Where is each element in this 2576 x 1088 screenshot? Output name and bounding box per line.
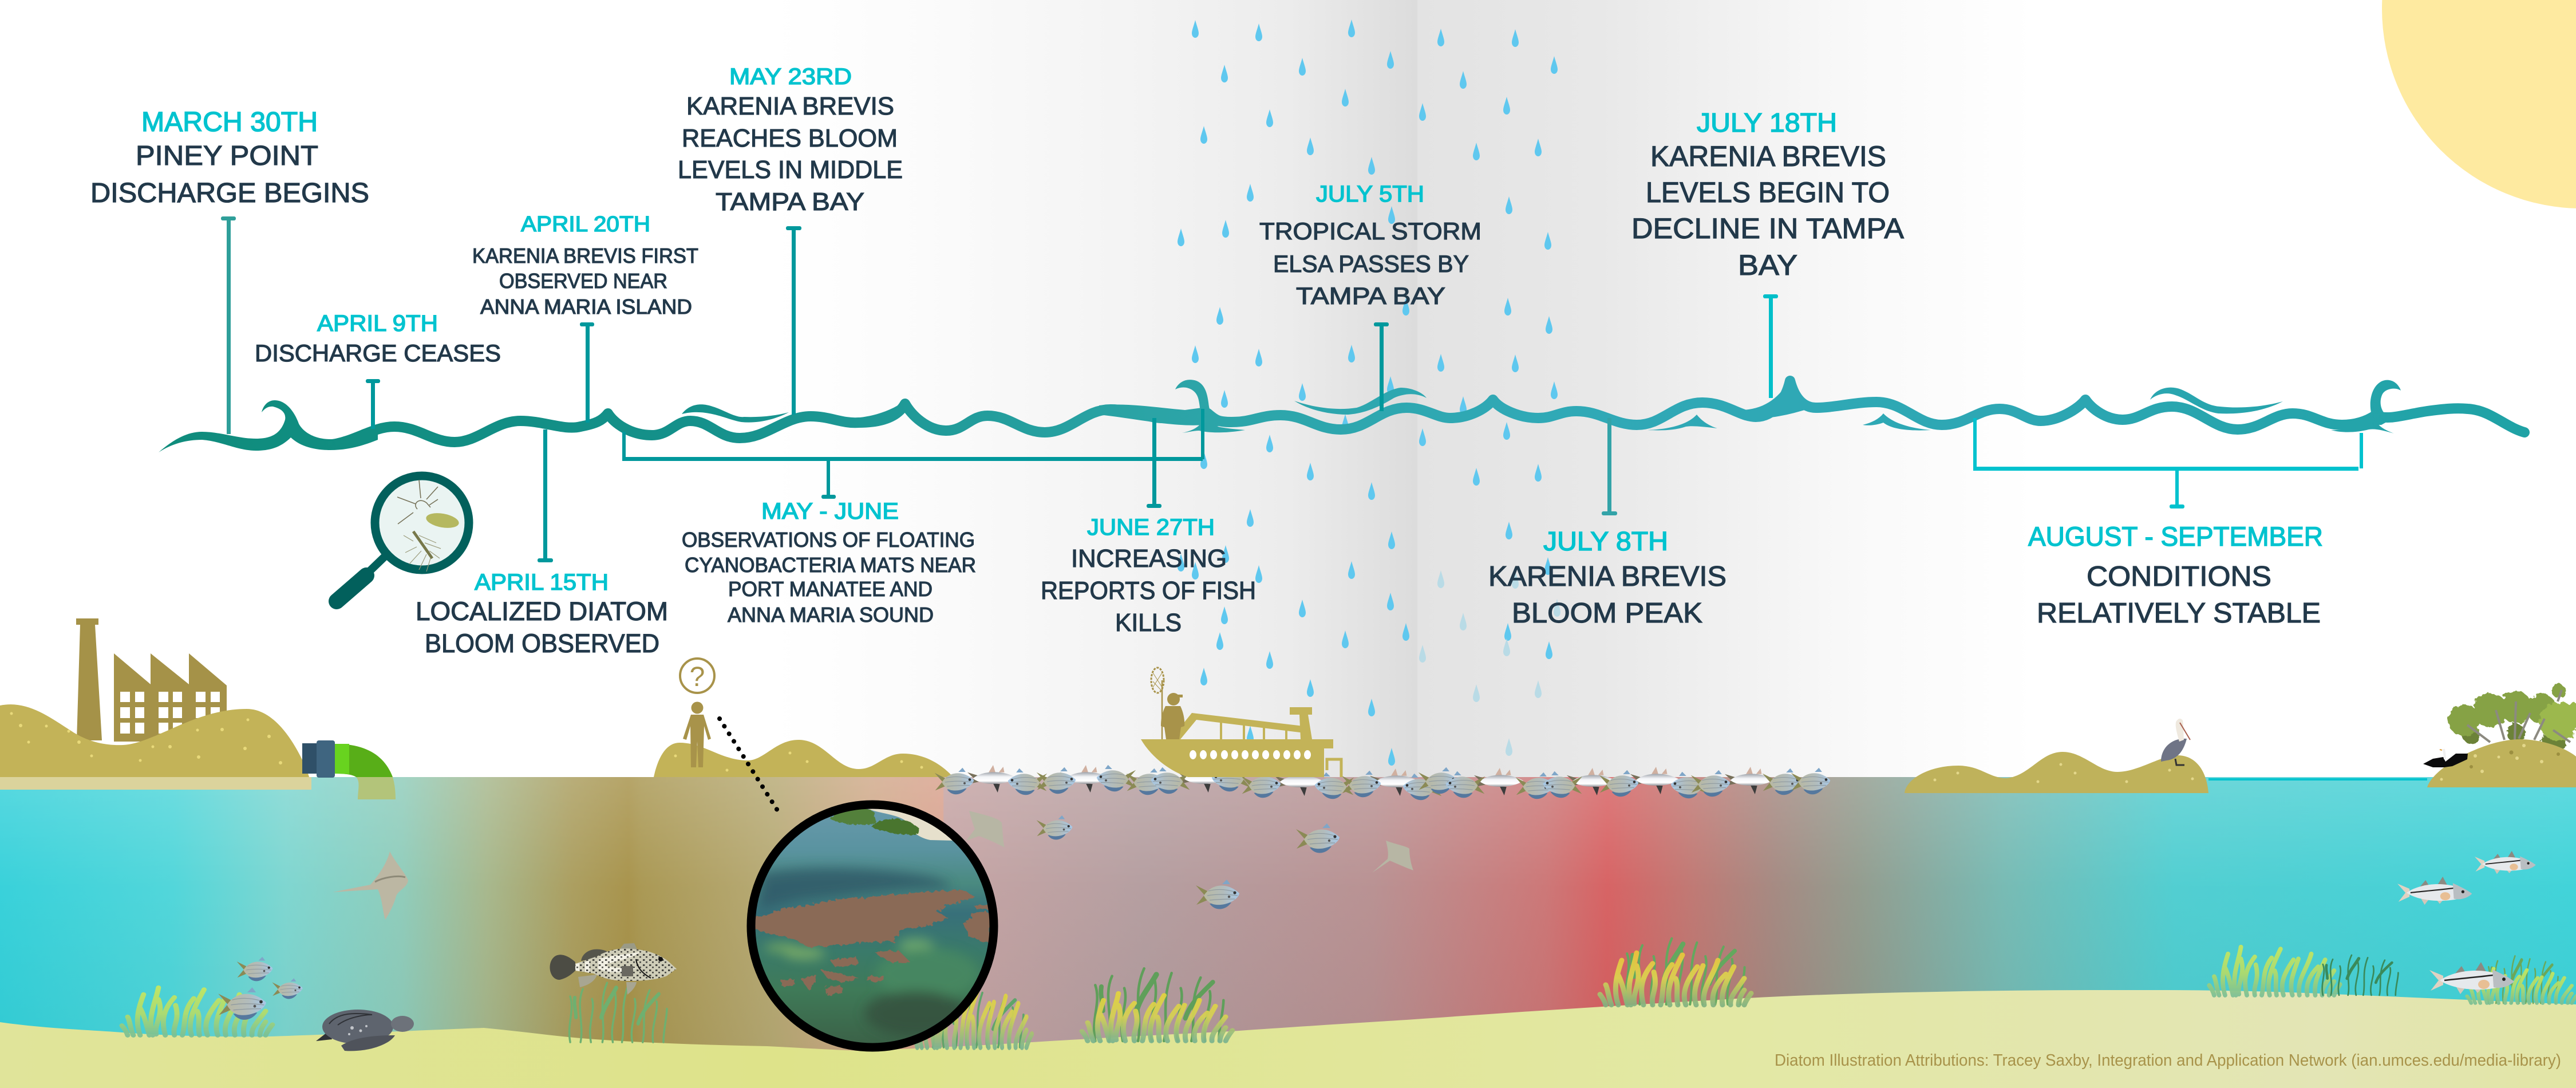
- timeline connector: April 9th: [366, 379, 380, 429]
- label: July 8th: [1488, 526, 1726, 629]
- label: July 5th: [1259, 182, 1481, 309]
- label: April 20th: APRIL 20TH: [521, 212, 650, 236]
- label: March 30th: [90, 107, 369, 208]
- small wave lines: [682, 404, 789, 423]
- curl: first breaking wave: [159, 400, 378, 452]
- timeline connector: June 27th: [1147, 418, 1161, 508]
- label: May 23rd: REACHES BLOOM: [682, 124, 898, 152]
- timeline connector: July 5th: [1374, 322, 1389, 411]
- label: May to June: ANNA MARIA SOUND: [728, 603, 934, 626]
- label: July 8th: BLOOM PEAK: [1512, 598, 1702, 629]
- label: August to September: RELATIVELY STABLE: [2037, 598, 2321, 629]
- fisher with net: [1151, 668, 1184, 739]
- timeline connector: March 30th: [221, 216, 236, 434]
- sand spit: [868, 809, 953, 841]
- label: April 15th: [416, 570, 668, 658]
- bracket: May to June: [622, 409, 1204, 499]
- cormorant: [2423, 749, 2468, 767]
- trees: [830, 807, 919, 834]
- pelican hill: [1905, 752, 2208, 793]
- label: June 27th: [1041, 515, 1256, 637]
- snook fish: [2397, 851, 2536, 994]
- label: July 8th: KARENIA BREVIS: [1488, 561, 1726, 592]
- label: August to September: CONDITIONS: [2087, 561, 2271, 592]
- seagrass beds: [122, 939, 2576, 1047]
- label: June 27th: KILLS: [1115, 609, 1182, 637]
- attribution: Diatom Illustration Attributions: Tracey Saxby, Integration and Application Network (ian.umces.edu/media-library): [1775, 1051, 2561, 1070]
- label: May to June: OBSERVATIONS OF FLOATING: [682, 528, 975, 551]
- label: May 23rd: KARENIA BREVIS: [686, 92, 894, 120]
- label: July 5th: TROPICAL STORM: [1259, 218, 1481, 245]
- label: March 30th: MARCH 30TH: [141, 107, 318, 137]
- wave timeline: [159, 378, 2524, 452]
- label: July 5th: JULY 5TH: [1316, 182, 1424, 207]
- label: July 18th: KARENIA BREVIS: [1650, 140, 1886, 172]
- sun: [2382, 0, 2576, 208]
- icon: factory: [76, 618, 227, 742]
- label: April 15th: APRIL 15TH: [475, 570, 609, 595]
- middle hill with observer: [654, 659, 953, 777]
- timeline connector: July 18th: [1763, 294, 1778, 398]
- label: August to September: [2028, 521, 2323, 629]
- ray: large: [333, 852, 408, 920]
- pelican: [2161, 719, 2190, 765]
- thicker wave sections: [841, 401, 905, 427]
- timeline connector: July 8th: [1602, 418, 1617, 515]
- label: March 30th: DISCHARGE BEGINS: [90, 178, 369, 208]
- label: June 27th: JUNE 27TH: [1087, 515, 1215, 540]
- label: July 5th: ELSA PASSES BY: [1273, 250, 1469, 277]
- label: July 5th: TAMPA BAY: [1296, 282, 1445, 309]
- icon: question bubble: [680, 659, 714, 693]
- hill: [0, 704, 309, 777]
- label: April 20th: ANNA MARIA ISLAND: [480, 295, 692, 318]
- timeline connector: April 20th: [580, 322, 594, 423]
- label: July 18th: [1631, 108, 1905, 281]
- icon: question bubble: ?: [690, 662, 705, 692]
- water body with changing colour: [0, 777, 2576, 1052]
- photo inset: floating cyanobacteria mats: [744, 799, 1002, 1054]
- timeline connector: May 23rd: [786, 226, 801, 415]
- fish: surface row of dead fish: [935, 765, 1830, 800]
- left hill and factory: [0, 618, 311, 790]
- rain drops: [1178, 19, 1560, 766]
- label: April 9th: DISCHARGE CEASES: [255, 340, 501, 366]
- trees: [2448, 684, 2576, 757]
- label: April 20th: [472, 212, 698, 318]
- ray: middle left: [966, 811, 1005, 847]
- label: July 18th: DECLINE IN TAMPA: [1631, 212, 1905, 245]
- label: June 27th: INCREASING: [1071, 545, 1227, 573]
- label: May to June: CYANOBACTERIA MATS NEAR: [685, 553, 976, 577]
- label: July 18th: LEVELS BEGIN TO: [1646, 176, 1890, 208]
- sandy seabed: [0, 990, 2576, 1088]
- right hill with trees: [2427, 684, 2576, 787]
- label: June 27th: REPORTS OF FISH: [1041, 577, 1256, 605]
- bracket: August to September: [1973, 418, 2363, 508]
- curl: september wave: [2350, 380, 2401, 426]
- label: May to June: PORT MANATEE AND: [728, 577, 933, 601]
- icon: person: [683, 702, 711, 767]
- label: August to September: AUGUST - SEPTEMBER: [2028, 521, 2323, 551]
- photo callout line: [720, 719, 781, 817]
- label: April 20th: KARENIA BREVIS FIRST: [472, 244, 698, 267]
- label: April 9th: [255, 311, 501, 366]
- label: May 23rd: [678, 64, 903, 216]
- label: May to June: [682, 499, 976, 626]
- label: May 23rd: MAY 23RD: [729, 64, 852, 89]
- label: April 15th: LOCALIZED DIATOM: [416, 597, 668, 626]
- sky background with storm band: [0, 0, 2576, 782]
- grouper: [550, 943, 677, 995]
- label: April 15th: BLOOM OBSERVED: [425, 629, 659, 658]
- label: May 23rd: TAMPA BAY: [716, 188, 864, 216]
- fish: swimming in bloom: [1037, 815, 1340, 909]
- icon: discharge pipe: [302, 740, 396, 799]
- label: April 20th: OBSERVED NEAR: [499, 269, 667, 293]
- fish: small group left: [218, 957, 303, 1020]
- label: July 8th: JULY 8TH: [1543, 526, 1668, 556]
- turtle: [316, 1010, 414, 1051]
- label: May to June: MAY - JUNE: [761, 499, 899, 524]
- curl: june wave: [1175, 380, 1236, 428]
- icon: research boat with fisher: [1141, 668, 1341, 777]
- label: March 30th: PINEY POINT: [136, 141, 318, 171]
- timeline connector: April 15th: [538, 429, 553, 562]
- label: April 9th: APRIL 9TH: [317, 311, 438, 336]
- label: May 23rd: LEVELS IN MIDDLE: [678, 156, 903, 184]
- icon: magnifying glass with diatoms: [337, 476, 469, 601]
- surface line right: [2208, 778, 2427, 780]
- floating mats: [754, 889, 990, 995]
- label: July 18th: JULY 18TH: [1697, 108, 1837, 137]
- ray: middle right: [1372, 841, 1413, 873]
- label: July 18th: BAY: [1738, 249, 1797, 281]
